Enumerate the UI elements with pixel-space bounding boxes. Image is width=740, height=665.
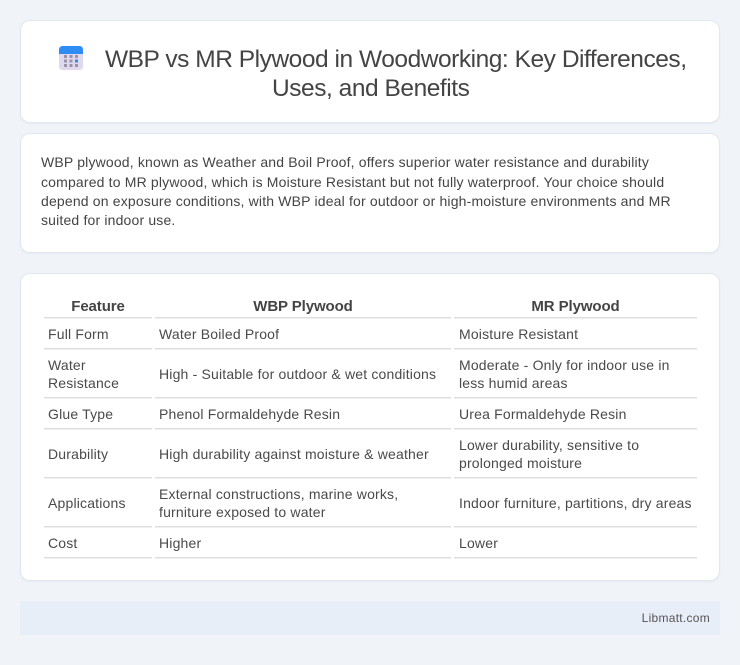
row: full form: Moisture Resistant — [459, 326, 578, 342]
table card — [20, 273, 720, 581]
row: durability: Durability — [48, 446, 108, 462]
intro text: compared to MR plywood, which is Moisture Resistant but not fully waterproof. Your choice should — [41, 174, 664, 190]
intro text: WBP plywood, known as Weather and Boil Proof, offers superior water resistance and durability — [41, 154, 649, 170]
row: water resistance: High - Suitable for outdoor & wet conditions — [159, 366, 436, 382]
icon: calendar — [59, 46, 83, 70]
footer text: Libmatt.com — [642, 611, 710, 625]
row: full form: Water Boiled Proof — [159, 326, 279, 342]
row: durability: High durability against moisture & weather — [159, 446, 429, 462]
row: durability — [48, 437, 639, 471]
row: durability: Lower durability, sensitive to — [459, 437, 639, 453]
row: cost: Lower — [459, 535, 498, 551]
row: full form — [48, 326, 578, 342]
heading: Uses, and Benefits — [272, 75, 469, 102]
header row: MR Plywood — [531, 298, 620, 315]
intro text — [41, 154, 671, 228]
table — [44, 298, 697, 559]
row: full form: Full Form — [48, 326, 109, 342]
row: water resistance: Water — [48, 357, 86, 373]
header row — [71, 298, 620, 315]
heading: WBP vs MR Plywood in Woodworking: Key Differences, — [105, 46, 687, 73]
row: applications: Indoor furniture, partitions, dry areas — [459, 495, 692, 511]
row: applications: furniture exposed to water — [159, 504, 326, 520]
row: glue type: Urea Formaldehyde Resin — [459, 406, 627, 422]
row: cost: Higher — [159, 535, 201, 551]
header row: Feature — [71, 298, 125, 315]
heading — [105, 46, 687, 102]
row: cost: Cost — [48, 535, 78, 551]
row: durability: prolonged moisture — [459, 455, 582, 471]
title card — [20, 20, 720, 123]
intro text: suited for indoor use. — [41, 212, 175, 228]
row: water resistance — [48, 357, 670, 391]
row: applications — [48, 486, 692, 520]
row: applications: External constructions, marine works, — [159, 486, 398, 502]
row: glue type: Glue Type — [48, 406, 113, 422]
row: cost — [48, 535, 498, 551]
row: applications: Applications — [48, 495, 126, 511]
row: water resistance: Moderate - Only for indoor use in — [459, 357, 670, 373]
footer bar — [20, 601, 720, 635]
row: water resistance: less humid areas — [459, 375, 568, 391]
intro text: depend on exposure conditions, with WBP ideal for outdoor or high-moisture environments and MR — [41, 193, 671, 209]
row: water resistance: Resistance — [48, 375, 119, 391]
intro card — [20, 133, 720, 253]
header row: WBP Plywood — [253, 298, 353, 315]
row: glue type: Phenol Formaldehyde Resin — [159, 406, 340, 422]
row: glue type — [48, 406, 627, 422]
